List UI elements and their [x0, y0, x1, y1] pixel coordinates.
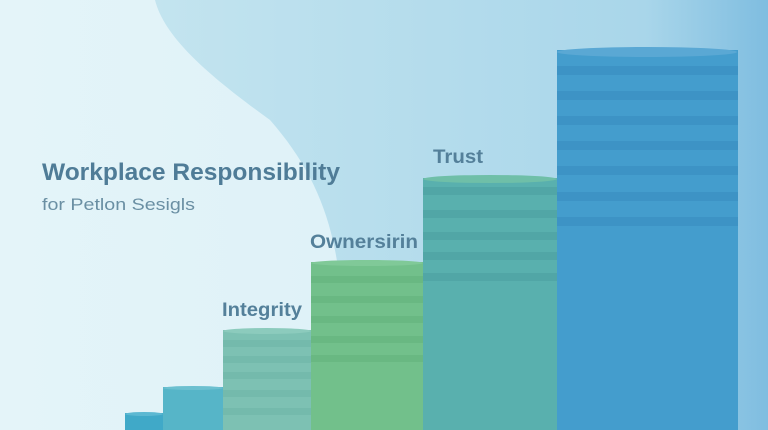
label: Integrity: Integrity	[222, 300, 302, 321]
bar 1	[125, 412, 163, 430]
bar 6	[557, 47, 738, 430]
label: Ownership: Ownersirin	[310, 232, 418, 253]
label: Trust: Trust	[433, 147, 484, 168]
bar: Trust	[423, 175, 557, 430]
title: Workplace Responsibility	[42, 159, 341, 186]
bar chart	[125, 47, 738, 430]
subtitle: for Petlon Sesigls	[42, 195, 195, 214]
bar: Ownership	[311, 260, 423, 430]
bar 2	[163, 386, 223, 430]
bar: Integrity	[223, 328, 311, 430]
